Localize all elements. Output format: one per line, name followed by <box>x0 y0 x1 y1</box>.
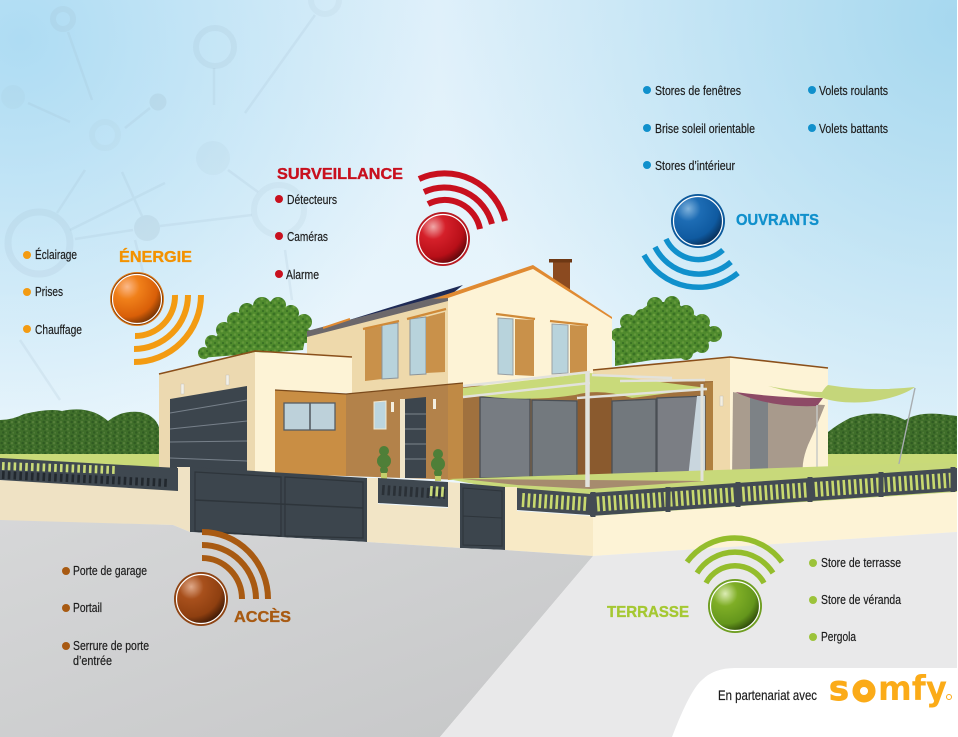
sliding gate <box>190 467 367 542</box>
fence terrace <box>517 467 957 517</box>
waves <box>644 239 738 287</box>
heading: ÉNERGIE <box>119 247 192 266</box>
lawn left <box>0 454 165 475</box>
list <box>643 83 888 173</box>
list: Chauffage <box>35 322 82 337</box>
roof with solar panels <box>307 285 463 337</box>
tree right <box>611 296 722 366</box>
waves <box>419 173 505 229</box>
gable <box>448 268 612 386</box>
list: Volets roulants <box>819 83 888 98</box>
list <box>275 192 337 282</box>
tree left <box>198 297 313 359</box>
list: d’entrée <box>73 653 112 668</box>
front wall left <box>0 467 190 532</box>
list: Pergola <box>821 629 857 644</box>
list: Stores de fenêtres <box>655 83 741 98</box>
sphere button <box>708 579 762 633</box>
SURVEILLANCE group <box>275 166 505 282</box>
upper windows and shutters <box>363 309 588 381</box>
wall centre <box>367 478 460 548</box>
garage tan face <box>159 352 255 474</box>
list: Porte de garage <box>73 563 147 578</box>
waves <box>687 538 782 583</box>
list <box>23 247 82 337</box>
alcove with curtain <box>732 392 825 481</box>
partner panel <box>672 0 958 737</box>
heading: TERRASSE <box>607 604 689 621</box>
sky background <box>0 0 958 560</box>
background network pattern <box>1 0 339 400</box>
OUVRANTS group <box>643 83 888 287</box>
terrace back wall <box>463 381 713 482</box>
chimney <box>549 259 572 292</box>
heading: OUVRANTS <box>736 212 819 229</box>
waves <box>134 295 201 362</box>
fence left <box>0 458 178 491</box>
pergola <box>463 372 707 487</box>
somfy logo <box>829 669 952 709</box>
road right <box>440 532 957 737</box>
list: Brise soleil orientable <box>655 121 755 136</box>
right wing cream face <box>730 357 828 484</box>
entrance door <box>374 397 436 478</box>
fence centre <box>378 478 448 507</box>
list: Serrure de porte <box>73 638 149 653</box>
right wing tan face <box>593 357 730 484</box>
list: Store de véranda <box>821 592 902 607</box>
list: Store de terrasse <box>821 555 901 570</box>
sphere button <box>671 194 725 248</box>
lawn right <box>820 454 957 485</box>
shade sail <box>735 385 915 477</box>
heading: ACCÈS <box>234 607 291 626</box>
heading: SURVEILLANCE <box>277 166 403 183</box>
list <box>62 563 149 668</box>
road left <box>0 520 593 737</box>
terrace ground and deck <box>448 462 957 516</box>
sphere button <box>416 212 470 266</box>
TERRASSE group <box>607 538 902 644</box>
partner text: En partenariat avec <box>718 687 817 703</box>
topiary plants <box>377 446 445 481</box>
list: Stores d’intérieur <box>655 158 736 173</box>
wall terrace <box>505 487 957 556</box>
upper storey left <box>307 297 448 393</box>
sliding glass doors <box>480 396 705 478</box>
list: Prises <box>35 284 63 299</box>
garage door <box>170 375 247 474</box>
ÉNERGIE group <box>23 247 201 362</box>
waves <box>202 532 268 599</box>
pedestrian gate <box>460 483 505 550</box>
list <box>809 555 902 644</box>
list: Portail <box>73 600 102 615</box>
lower brick walls <box>275 383 463 480</box>
garage cream face <box>255 352 352 474</box>
garage side window <box>284 403 335 430</box>
somfy logo: s <box>829 669 849 709</box>
somfy logo: mfy <box>878 669 947 709</box>
list: Caméras <box>287 229 328 244</box>
list: Alarme <box>286 267 319 282</box>
house <box>159 259 957 516</box>
bushes left <box>0 409 160 454</box>
ACCÈS group <box>62 532 291 668</box>
list: Volets battants <box>819 121 888 136</box>
list: Détecteurs <box>287 192 337 207</box>
sphere button <box>110 272 164 326</box>
sphere button <box>174 572 228 626</box>
list: Éclairage <box>35 247 77 262</box>
bushes right <box>828 413 957 454</box>
